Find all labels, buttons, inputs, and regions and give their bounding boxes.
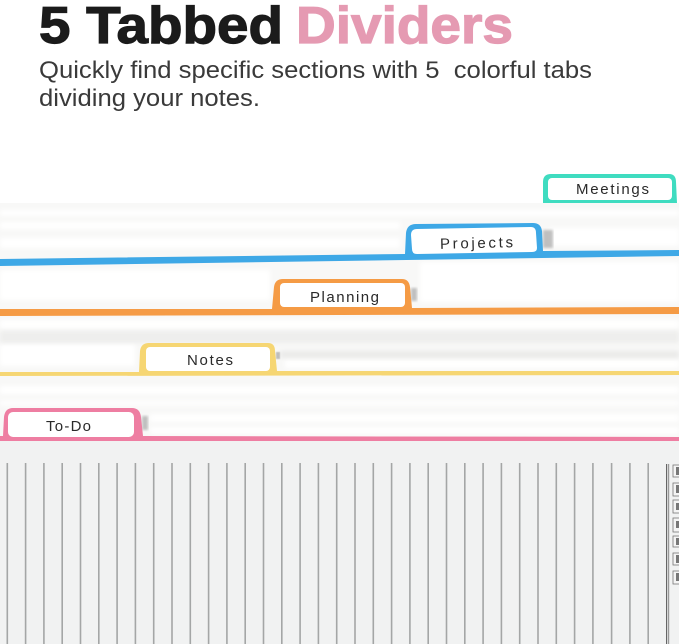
divider: Notes <box>0 343 679 376</box>
divider: To-Do: To-Do <box>46 418 91 435</box>
subtitle <box>39 57 592 112</box>
subtitle: Quickly find specific sections with 5 colorful tabs <box>39 57 592 84</box>
tab: Meetings: Meetings <box>576 181 649 198</box>
divider: To-Do <box>0 408 679 441</box>
divider: Planning <box>0 279 679 316</box>
divider: Planning: Planning <box>310 289 379 306</box>
ruled notebook page <box>0 441 679 644</box>
subtitle: dividing your notes. <box>39 85 260 112</box>
title <box>39 0 513 55</box>
divider: Projects <box>0 223 679 266</box>
tab: Meetings <box>543 174 677 203</box>
divider: Projects: Projects <box>440 234 513 253</box>
index boxes <box>673 465 679 584</box>
divider: Notes: Notes <box>187 352 233 369</box>
paper stack <box>0 203 679 441</box>
